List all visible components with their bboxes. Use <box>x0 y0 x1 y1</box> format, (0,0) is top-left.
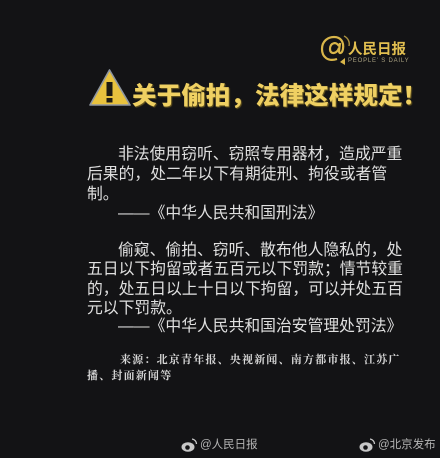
logo: People's Daily: PEOPLE' S DAILY <box>348 58 409 64</box>
watermark: Beijing Release Weibo: @北京发布 <box>378 439 436 451</box>
text block: criminal law: 制。 <box>87 186 119 203</box>
watermark: People's Daily Weibo: @人民日报 <box>200 439 258 451</box>
text block: public security law: 五日以下拘留或者五百元以下罚款；情节较重 <box>87 261 403 278</box>
logo: People's Daily: 人民日报 <box>348 42 406 58</box>
source note: 播、封面新闻等 <box>87 370 172 382</box>
title: 关于偷拍，法律这样规定！ <box>132 83 427 110</box>
source note: 来源：北京青年报、央视新闻、南方都市报、江苏广 <box>120 354 401 366</box>
text block: criminal law: ——《中华人民共和国刑法》 <box>118 205 323 222</box>
text block: criminal law: 后果的，处二年以下有期徒刑、拘役或者管 <box>87 166 387 183</box>
icon: warning triangle <box>89 69 131 106</box>
watermark: People's Daily Weibo <box>182 438 258 452</box>
watermark: Beijing Release Weibo <box>360 438 436 452</box>
text block: public security law: 元以下罚款。 <box>87 300 182 317</box>
text block: public security law <box>87 241 403 335</box>
text block: criminal law: 非法使用窃听、窃照专用器材，造成严重 <box>118 146 402 163</box>
text block: public security law: 偷窥、偷拍、窃听、散布他人隐私的，处 <box>118 242 402 259</box>
source note <box>87 354 401 382</box>
text block: criminal law <box>87 145 402 222</box>
text block: public security law: 的，处五日以上十日以下拘留，可以并处五百 <box>87 281 403 298</box>
logo: People's Daily <box>320 35 409 65</box>
text block: public security law: ——《中华人民共和国治安管理处罚法》 <box>118 318 402 335</box>
